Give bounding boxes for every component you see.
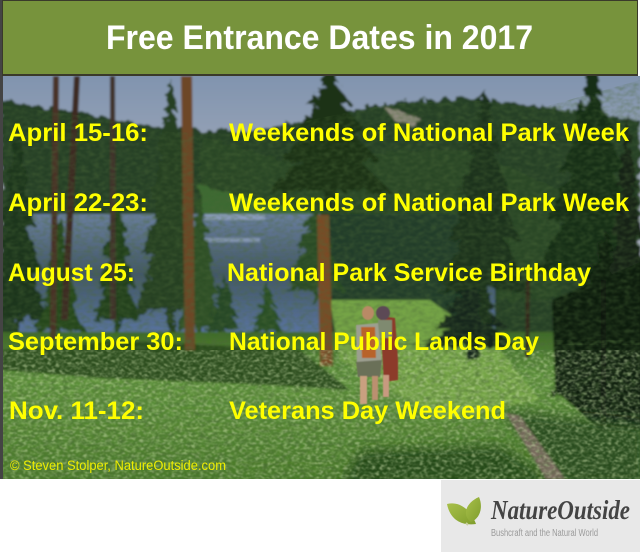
lake [15, 214, 495, 334]
tree trunks [50, 76, 530, 366]
meadow [0, 332, 640, 482]
row: August 25 [8, 259, 591, 287]
background forest left [0, 78, 283, 350]
row: September 30 [8, 328, 539, 356]
forest texture [0, 76, 640, 346]
fallen log [506, 413, 565, 479]
row: April 22-23 [8, 189, 629, 217]
row: Nov. 11-12: Veterans Day Weekend [229, 397, 506, 425]
hills [0, 98, 640, 340]
title: Free Entrance Dates in 2017 [106, 19, 533, 57]
row: April 22-23: Weekends of National Park Week [229, 189, 629, 217]
title banner [2, 0, 638, 76]
row: April 15-16: April 15-16: [8, 119, 148, 147]
meadow grass texture [0, 340, 640, 479]
row: Nov. 11-12 [9, 397, 506, 425]
hikers on the trail [356, 306, 398, 404]
row: August 25: National Park Service Birthday [227, 259, 591, 287]
row: April 22-23: April 22-23: [8, 189, 148, 217]
row: April 15-16: Weekends of National Park Week [229, 119, 629, 147]
row: Nov. 11-12: Nov. 11-12: [9, 397, 144, 425]
icon: green leaves [447, 497, 481, 525]
dark trees on the right [532, 65, 640, 420]
logo panel: NatureOutside [441, 480, 640, 552]
row: August 25: August 25: [8, 259, 135, 287]
row: September 30: National Public Lands Day [229, 328, 539, 356]
photo: hikers in a forest meadow beside a lake [0, 65, 640, 485]
row: September 30: September 30: [8, 328, 183, 356]
central dark tree [268, 66, 530, 360]
photo credit: © Steven Stolper, NatureOutside.com [10, 458, 226, 473]
row: April 15-16 [8, 119, 629, 147]
logo tagline: Bushcraft and the Natural World [491, 528, 598, 539]
date list [8, 119, 629, 425]
